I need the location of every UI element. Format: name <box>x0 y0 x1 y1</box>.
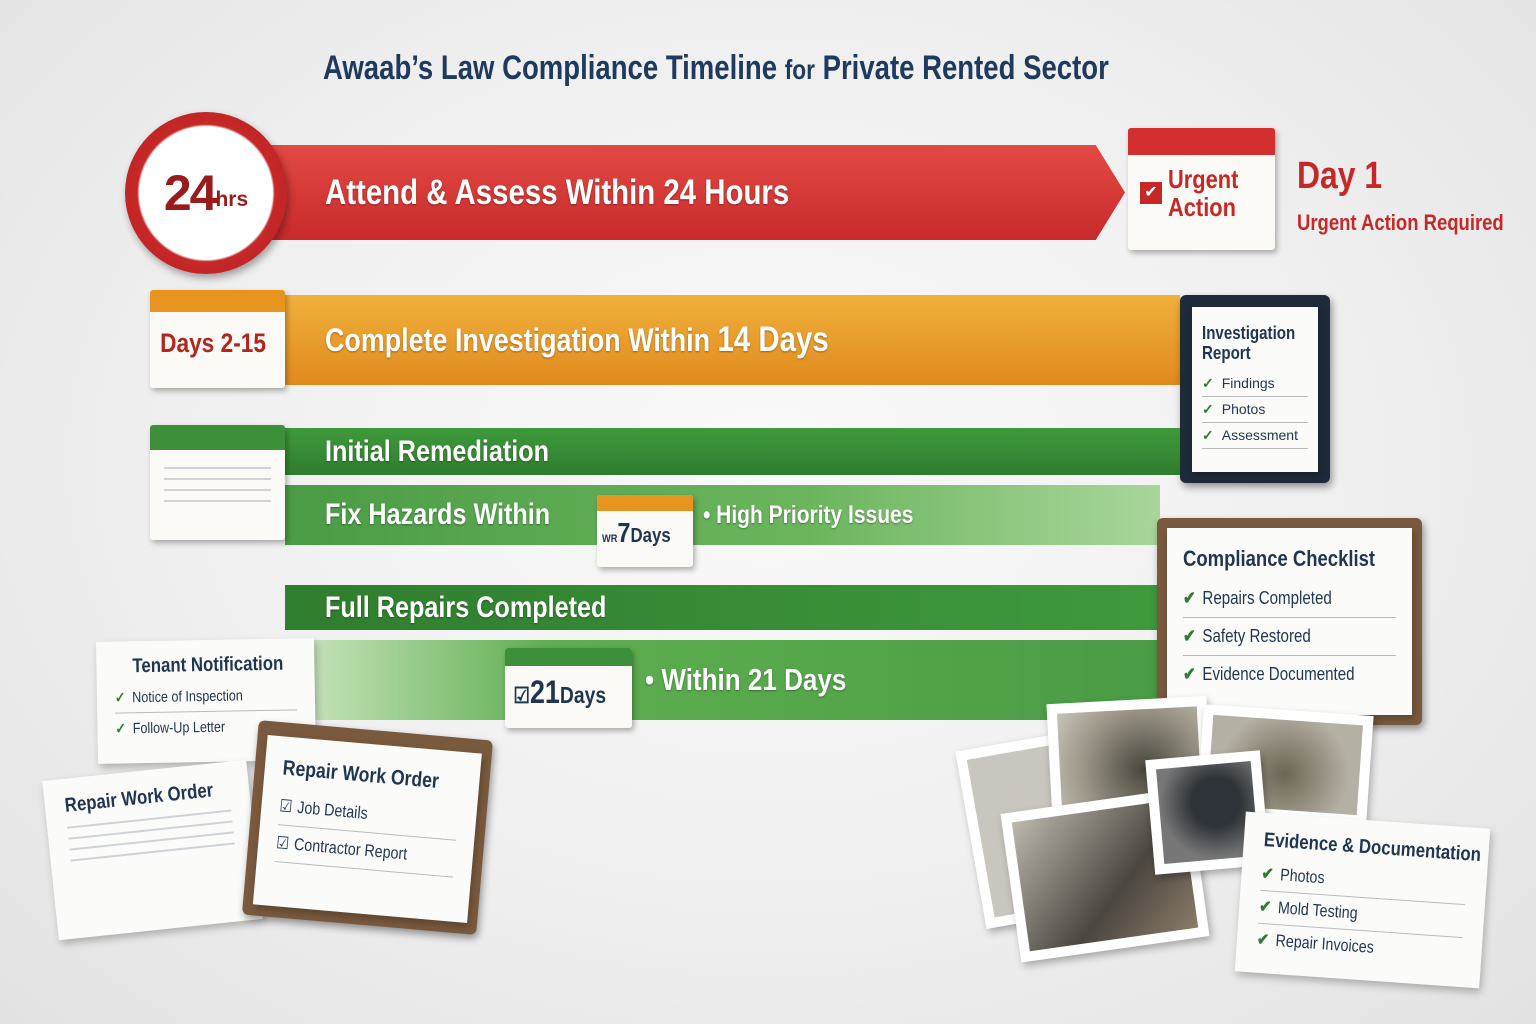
calendar: 7 days <box>597 495 693 567</box>
clipboard: compliance checklist: ✔ Safety Restored <box>1183 626 1311 646</box>
calendar: urgent action: Urgent <box>1168 164 1238 194</box>
clipboard: investigation report: ✓ Findings <box>1202 375 1275 391</box>
band: orange investigation: Complete Investigation Within 14 Days <box>325 320 829 359</box>
clipboard: repair work order: ☑Contractor Report <box>276 833 408 864</box>
clipboard: investigation report: ✓ Assessment <box>1202 427 1298 443</box>
paper: tenant notification: ✓ Notice of Inspection <box>115 687 243 707</box>
clipboard: repair work order <box>242 720 493 935</box>
paper: tenant notification <box>96 638 316 764</box>
clipboard: compliance checklist: Compliance Checklist <box>1183 546 1375 571</box>
paper: evidence & documentation <box>1235 812 1490 988</box>
paper: evidence & documentation: ✔ Photos <box>1261 864 1325 887</box>
calendar: 7 days: WR7Days <box>602 517 671 548</box>
band: red attend & assess: Attend & Assess Within 24 Hours <box>325 172 789 212</box>
paper: repair work order <box>42 760 263 940</box>
calendar: initial remediation <box>150 425 285 540</box>
calendar: days 2-15: Days 2-15 <box>160 328 266 358</box>
band: red attend & assess <box>271 145 1125 240</box>
band: fix hazards: Fix Hazards Within <box>325 498 550 531</box>
band: full repairs: Full Repairs Completed <box>325 590 606 624</box>
text: day 1: Day 1 <box>1297 155 1382 197</box>
calendar: days 2-15 <box>150 290 285 388</box>
clipboard: compliance checklist: ✔ Repairs Completed <box>1183 588 1332 608</box>
title: Awaab’s Law Compliance Timeline for Private Rented Sector <box>323 49 1109 87</box>
paper: evidence & documentation: ✔ Repair Invoices <box>1256 930 1374 957</box>
paper: evidence & documentation: Evidence & Documentation <box>1263 829 1482 866</box>
icon: clock 24 hrs <box>125 112 287 274</box>
calendar: urgent action: Action <box>1168 192 1236 222</box>
paper: repair work order: Repair Work Order <box>64 779 214 817</box>
band: fix hazards: • High Priority Issues <box>703 500 913 528</box>
paper: tenant notification: ✓ Follow-Up Letter <box>115 719 225 738</box>
calendar: 21 days <box>505 648 632 728</box>
clipboard: compliance checklist <box>1157 518 1422 725</box>
band: full repairs <box>285 585 1160 630</box>
clipboard: repair work order: Repair Work Order <box>282 756 440 793</box>
icon: clock 24 hrs: 24 <box>164 165 215 221</box>
clipboard: investigation report: Report <box>1202 343 1251 363</box>
band: within 21 days <box>285 640 1160 720</box>
band: orange investigation <box>150 295 1180 385</box>
band: within 21 days: • Within 21 Days <box>645 662 846 697</box>
icon: clock 24 hrs: hrs <box>215 188 248 211</box>
clipboard: repair work order: ☑Job Details <box>279 796 369 823</box>
text: day 1 <box>1297 155 1504 235</box>
photos: evidence <box>954 696 1379 970</box>
calendar: 21 days: ☑21Days <box>513 674 606 710</box>
clipboard: compliance checklist: ✔ Evidence Documented <box>1183 664 1355 684</box>
calendar: urgent action: ✔ <box>1144 184 1158 201</box>
text: day 1: Urgent Action Required <box>1297 210 1504 235</box>
clipboard: investigation report <box>1180 295 1330 483</box>
band: initial remediation <box>285 428 1180 475</box>
band: fix hazards <box>285 485 1160 545</box>
band: initial remediation: Initial Remediation <box>325 434 549 468</box>
clipboard: investigation report: ✓ Photos <box>1202 401 1265 417</box>
clipboard: investigation report: Investigation <box>1202 323 1295 343</box>
paper: evidence & documentation: ✔ Mold Testing <box>1259 897 1358 923</box>
calendar: urgent action <box>1128 128 1275 250</box>
paper: tenant notification: Tenant Notification <box>132 653 283 677</box>
